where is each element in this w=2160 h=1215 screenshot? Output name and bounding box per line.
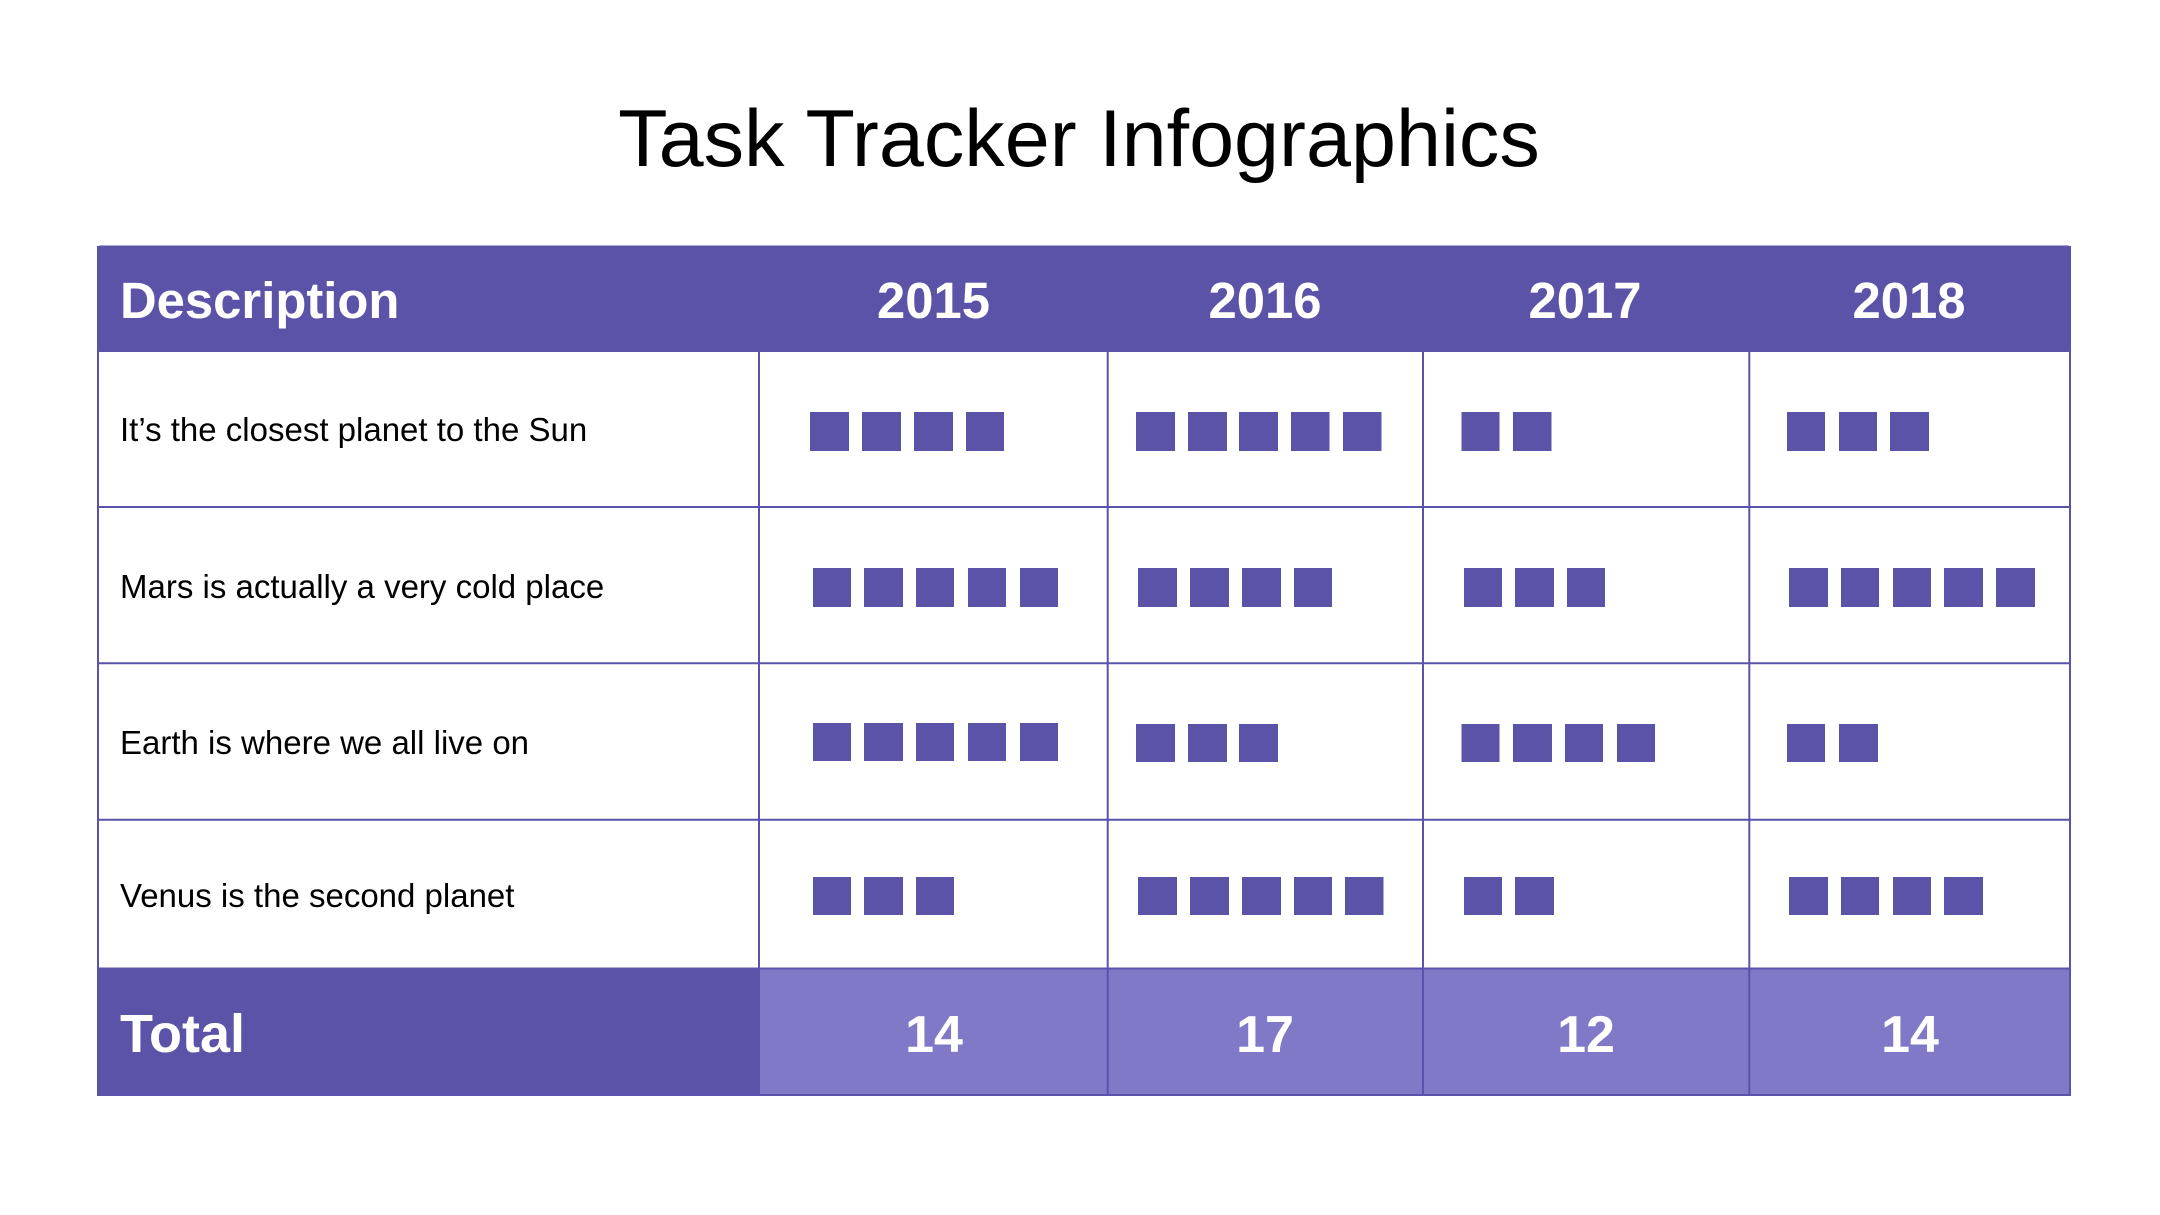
header row: 2017 [1528, 272, 1642, 329]
total row: Total [120, 1004, 245, 1064]
header row: Description [120, 272, 399, 329]
total row: 14 [905, 1006, 963, 1064]
panel: task table [97, 246, 2071, 1095]
header row: 2018 [1852, 272, 1966, 329]
row 4 description: Venus is the second planet [120, 877, 514, 914]
row 2 squares [813, 568, 2035, 607]
row 1 description: It’s the closest planet to the Sun [120, 411, 587, 448]
row 3 squares [813, 723, 1878, 762]
total row [97, 968, 2071, 1095]
title: Task Tracker Infographics [618, 94, 1540, 184]
row 4 squares [813, 877, 1983, 915]
row 2 description: Mars is actually a very cold place [120, 568, 604, 605]
total row: 12 [1557, 1006, 1615, 1064]
row 3 description: Earth is where we all live on [120, 724, 529, 761]
header row: 2016 [1208, 272, 1322, 329]
total row: 17 [1236, 1006, 1294, 1064]
row 1 squares [810, 412, 1929, 451]
header row [97, 246, 2071, 352]
total row: 14 [1881, 1006, 1939, 1064]
header row: 2015 [877, 272, 990, 329]
